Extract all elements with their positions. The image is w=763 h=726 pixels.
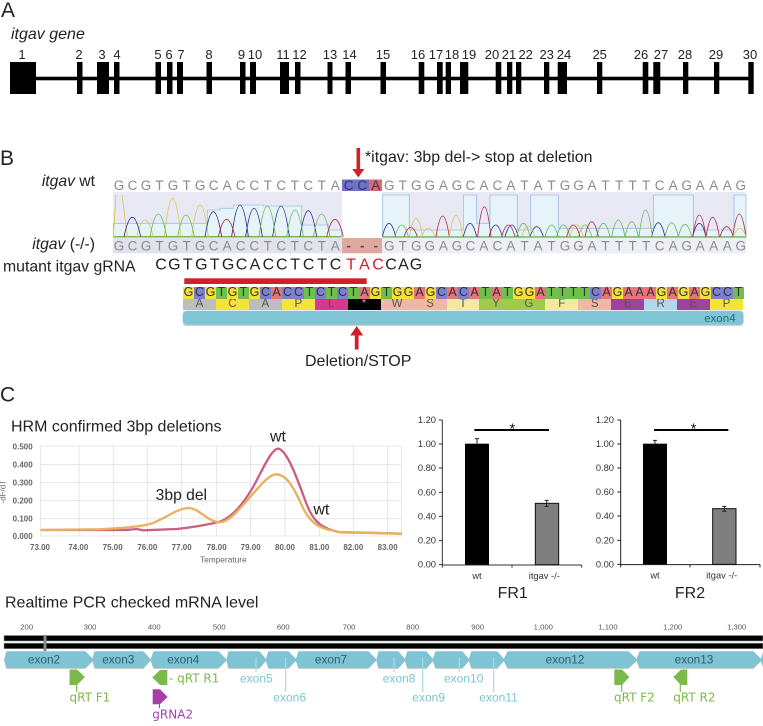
small exon names: exon6: [273, 691, 306, 705]
y axis labels: [13, 443, 33, 541]
x axis labels: 73.00: [30, 543, 51, 552]
x axis labels: 77.00: [172, 543, 192, 552]
y axis labels: 0.500: [13, 443, 33, 452]
gRNA sequence: CGTGTGCACCTCTC TACCAG: [155, 256, 422, 274]
exon numbers: 9: [238, 47, 245, 62]
exon numbers: 25: [592, 47, 607, 62]
x axis labels: 76.00: [137, 543, 158, 552]
exon names: exon13: [675, 652, 714, 666]
exon names: exon2: [28, 652, 60, 666]
y axis labels: 0.400: [13, 461, 33, 470]
exon numbers: 2: [75, 47, 83, 62]
ruler labels: [20, 622, 746, 632]
ruler labels: 1,000: [534, 622, 553, 632]
ruler tracks: [4, 636, 763, 649]
FR1 x labels: [471, 571, 560, 581]
FR1 significance line: [474, 429, 549, 431]
x axis labels: 82.00: [343, 543, 364, 552]
wt row label: itgav wt: [42, 173, 96, 190]
primer qRT R2: [673, 670, 716, 705]
ruler labels: 300: [84, 622, 96, 632]
deletion stop label: Deletion/STOP: [305, 353, 411, 370]
exon numbers: 17: [429, 47, 443, 62]
track label: exon4: [704, 313, 736, 325]
exon numbers: 29: [709, 47, 723, 62]
primer qRT R2: qRT R2: [673, 691, 716, 705]
exon numbers: 12: [292, 47, 307, 62]
ruler marker: [44, 635, 46, 651]
mutant sequence letters: GCGTGTGCACCTCTCTA --- GTGGAGCACATATGGATTTTCAGAAAG: [114, 238, 746, 254]
exon numbers: [18, 47, 757, 62]
small exon names: exon5: [240, 671, 273, 685]
yellow peaks: [113, 195, 208, 237]
primer qRT F2: qRT F2: [614, 691, 655, 705]
realtime PCR heading: Realtime PCR checked mRNA level: [5, 594, 258, 611]
intron line: [30, 77, 752, 80]
plot grid: [41, 446, 402, 536]
exon numbers: 3: [98, 47, 106, 62]
FR2 x labels: wt: [649, 571, 660, 581]
small exon names: exon8: [383, 671, 416, 685]
exon numbers: 19: [462, 47, 476, 62]
exon numbers: 1: [18, 47, 26, 62]
exon numbers: 28: [678, 47, 692, 62]
x axis labels: [30, 543, 398, 552]
right traces: [382, 195, 746, 237]
track body: [183, 311, 743, 325]
red peaks: [218, 219, 343, 237]
exon numbers: 26: [634, 47, 648, 62]
x axis title: Temperature: [200, 554, 247, 564]
primer qRT F2: [614, 670, 655, 705]
baseline right: [383, 235, 746, 239]
FR1 y labels: 1.00: [418, 439, 436, 449]
primer qRT F1: [70, 670, 110, 705]
FR2 y labels: 1.00: [596, 439, 614, 449]
exon numbers: 14: [342, 47, 357, 62]
exon numbers: 7: [177, 47, 185, 62]
FR2 y labels: 0.80: [596, 463, 614, 473]
FR2 mutant bar: [713, 509, 736, 564]
primer qRT R1: [152, 670, 219, 685]
baseline left: [113, 235, 342, 239]
exon numbers: 27: [654, 47, 668, 62]
x axis labels: 75.00: [103, 543, 123, 552]
exon numbers: 23: [539, 47, 554, 62]
red peaks: [404, 207, 746, 237]
y axis labels: 0.300: [13, 479, 33, 488]
ruler labels: 500: [213, 622, 226, 632]
wt label top: wt: [269, 429, 287, 446]
ruler labels: 700: [343, 622, 355, 632]
panel C HRM melt curve: [0, 384, 402, 564]
exon numbers: 13: [323, 47, 337, 62]
primer qRT F1: qRT F1: [70, 691, 110, 705]
FR1 error bars: [475, 439, 549, 506]
FR1 chart: [418, 415, 582, 602]
exon names: [28, 652, 714, 666]
FR2 significance line: [654, 429, 728, 431]
x axis labels: 83.00: [378, 543, 398, 552]
exon numbers: 22: [518, 47, 533, 62]
exon numbers: 24: [557, 47, 571, 62]
panel letter B: B: [0, 147, 14, 170]
highlighted deleted codon in wild type: [342, 180, 382, 191]
mutant sequence band: [113, 238, 746, 253]
exon numbers: 10: [248, 47, 262, 62]
gene title: itgav gene: [11, 26, 85, 43]
exon numbers: 8: [205, 47, 213, 62]
FR1 star: *: [509, 421, 515, 437]
FR2 error bars: [653, 440, 726, 511]
FR2 star: *: [691, 421, 697, 437]
gRNA2 marker: [152, 689, 193, 721]
track shadow: [183, 312, 744, 326]
small exon names: exon10: [444, 671, 484, 685]
chromatogram background: [113, 192, 746, 238]
red arrow up: [350, 326, 363, 350]
exon names: exon12: [546, 652, 584, 666]
yellow peaks: [409, 215, 746, 237]
exon numbers: 11: [276, 47, 290, 62]
FR1 caption: FR1: [498, 585, 528, 602]
exon names: exon7: [315, 652, 347, 666]
FR2 caption: FR2: [675, 585, 705, 602]
FR2 x labels: [649, 571, 737, 581]
FR1 y labels: [418, 415, 436, 570]
exon leader lines: [256, 657, 494, 692]
x axis labels: 78.00: [207, 543, 227, 552]
FR2 y labels: 0.00: [596, 559, 614, 569]
FR1 y labels: 0.20: [418, 536, 436, 546]
exon blocks: [10, 62, 754, 94]
quality boxes right: [383, 195, 746, 237]
exon numbers: 15: [376, 47, 390, 62]
small exon names: exon11: [479, 691, 518, 705]
y axis labels: 0.100: [13, 515, 33, 524]
amino acid row: [183, 299, 743, 310]
exon numbers: 16: [411, 47, 425, 62]
exon arrows: [5, 652, 763, 667]
panel B: chromatogram: [0, 147, 746, 370]
wt label lower: wt: [312, 501, 330, 518]
FR2 wt bar: [643, 444, 667, 564]
y axis labels: 0.000: [13, 532, 33, 541]
blue peaks: [124, 205, 317, 237]
red guide bar: [184, 278, 367, 284]
exon names: exon4: [167, 652, 200, 666]
small exon names: [240, 671, 518, 705]
exon numbers: 20: [485, 47, 499, 62]
blue peaks: [382, 223, 706, 237]
FR1 y labels: 0.00: [418, 560, 436, 570]
mutant row label: itgav (-/-): [32, 236, 95, 253]
exon numbers: 18: [445, 47, 459, 62]
gRNA2 marker: gRNA2: [152, 707, 193, 721]
ruler labels: 400: [148, 622, 161, 632]
FR1 axes: [439, 420, 582, 568]
red arrow down: [352, 148, 364, 178]
gRNA label: mutant itgav gRNA: [3, 258, 136, 276]
ruler labels: 900: [471, 622, 484, 632]
3bp del label: 3bp del: [156, 487, 207, 504]
FR1 y labels: 0.60: [418, 487, 436, 497]
colored nucleotide row: [183, 287, 744, 299]
HRM title: HRM confirmed 3bp deletions: [11, 419, 222, 436]
orange curve: [41, 474, 402, 534]
x axis labels: 81.00: [309, 543, 330, 552]
deletion note: *itgav: 3bp del-> stop at deletion: [365, 149, 592, 166]
FR1 mutant bar: [535, 503, 559, 565]
left traces: [113, 195, 343, 237]
FR1 y labels: 0.80: [418, 463, 436, 473]
FR2 y labels: 0.20: [596, 535, 614, 545]
ruler labels: 200: [20, 622, 33, 632]
exon4 track: [183, 311, 743, 326]
bar chart FR1 and FR2: [418, 415, 760, 602]
ruler labels: 600: [277, 622, 290, 632]
FR1 y labels: 0.40: [418, 511, 436, 521]
FR2 chart: [596, 415, 760, 602]
pink curve: [41, 449, 402, 534]
panel letter C: C: [0, 384, 15, 407]
exon numbers: 6: [165, 47, 173, 62]
exon numbers: 5: [154, 47, 162, 62]
FR1 x labels: wt: [471, 571, 482, 581]
FR2 y labels: [596, 415, 614, 569]
FR1 x labels: itgav -/-: [529, 571, 560, 581]
wild type sequence letters: GCGTGTGCACCTCTCTA CCA GTGGAGCACATATGGATTTTCAGAAAG: [114, 178, 746, 193]
exon names: exon3: [102, 652, 135, 666]
ruler labels: 1,200: [663, 622, 682, 632]
exon numbers: 30: [743, 47, 757, 62]
panel A: itgav gene map: [1, 0, 757, 94]
y axis labels: 0.200: [13, 497, 33, 506]
transcript map: [4, 594, 763, 721]
exon numbers: 21: [502, 47, 516, 62]
ruler labels: 800: [406, 622, 419, 632]
ruler labels: 1,100: [598, 622, 618, 632]
x axis labels: 80.00: [275, 543, 296, 552]
green peaks: [150, 206, 330, 237]
x axis labels: 79.00: [241, 543, 261, 552]
FR2 axes: [617, 420, 760, 567]
exon numbers: 4: [113, 47, 121, 62]
x axis labels: 74.00: [68, 543, 89, 552]
FR2 y labels: 1.20: [596, 415, 614, 425]
small exon names: exon9: [412, 691, 445, 705]
quality area left: [113, 205, 342, 237]
FR1 wt bar: [465, 444, 489, 565]
ruler labels: 1,300: [727, 622, 746, 632]
FR2 x labels: itgav -/-: [706, 571, 737, 581]
primer qRT R1: - qRT R1: [169, 671, 219, 685]
FR2 y labels: 0.60: [596, 487, 614, 497]
green peaks: [395, 210, 692, 237]
FR1 y labels: 1.20: [418, 415, 436, 425]
FR2 y labels: 0.40: [596, 511, 614, 521]
